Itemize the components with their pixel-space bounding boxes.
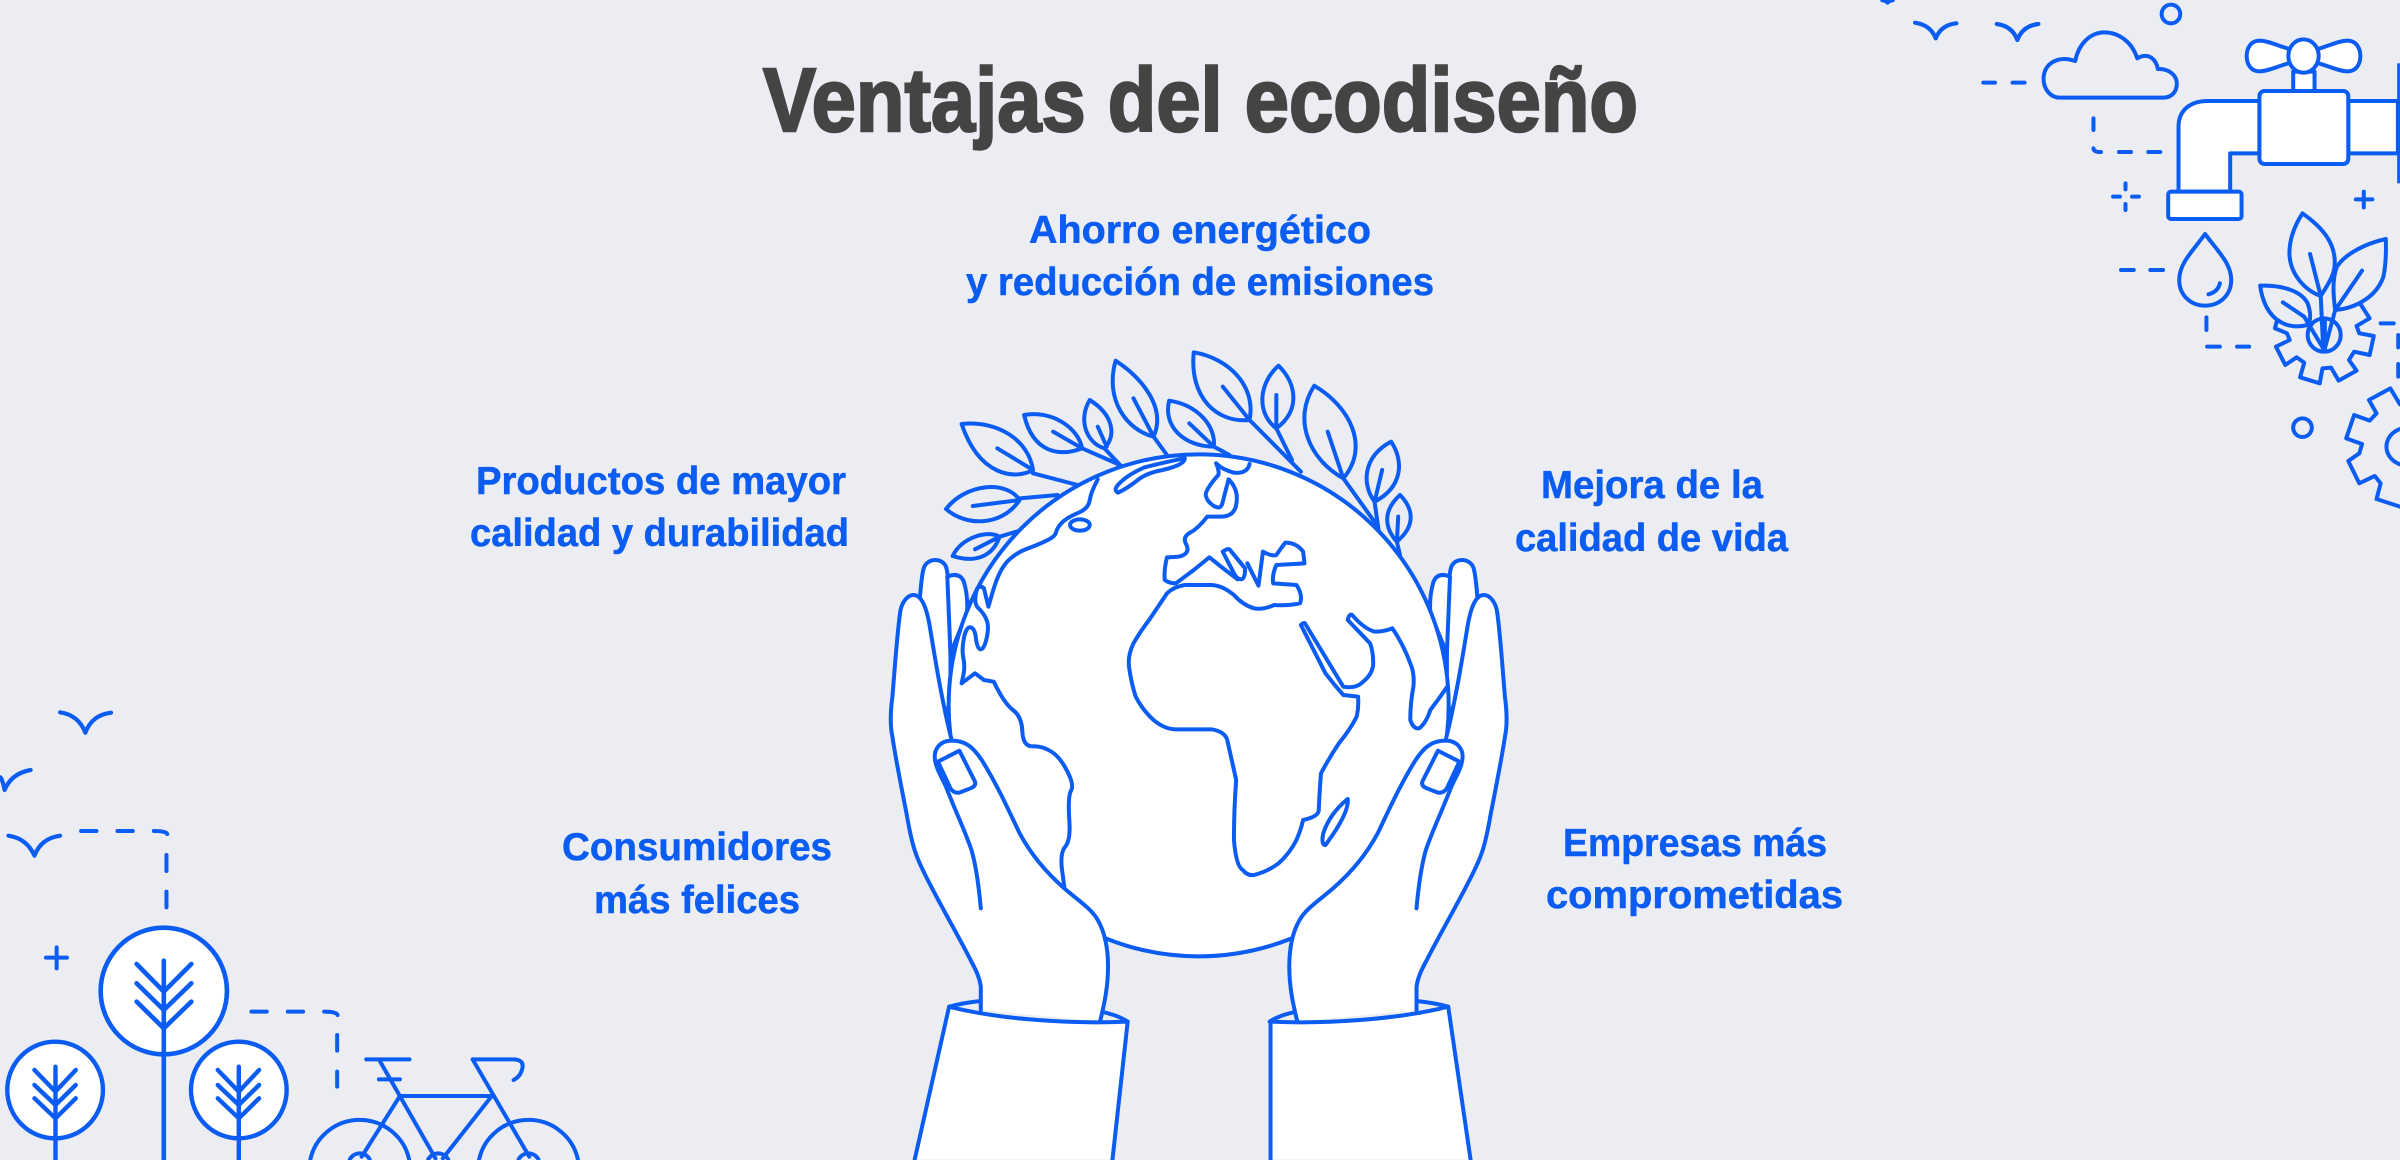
label: productos de mayor calidad: Productos de mayor: [476, 460, 846, 503]
globe: [949, 454, 1449, 956]
bottom-left decoration: [0, 712, 578, 1159]
label: mejora de la calidad de vida: calidad de vida: [1515, 517, 1788, 560]
label: mejora de la calidad de vida: [1515, 464, 1788, 560]
label: ahorro energético: Ahorro energético: [1029, 209, 1371, 252]
icon: tree large: [101, 928, 227, 1159]
icon: second gear: [2346, 388, 2400, 507]
left hand: [891, 595, 1128, 1159]
icon: sparkle and plus: [2113, 183, 2372, 210]
back fingers: [918, 560, 1479, 720]
label: consumidores más felices: [562, 826, 832, 922]
illustration: hands holding the globe: [891, 352, 1507, 1159]
icon: cloud: [2044, 32, 2177, 98]
label: consumidores más felices: más felices: [594, 879, 800, 922]
title: Ventajas del ecodiseño: [763, 51, 1638, 151]
label: productos de mayor calidad: calidad y durabilidad: [470, 512, 849, 555]
icon: water drop: [2179, 234, 2231, 306]
label: ahorro energético: y reducción de emisiones: [966, 261, 1434, 304]
label: ahorro energético: [966, 209, 1434, 304]
label: empresas más comprometidas: comprometidas: [1546, 874, 1843, 917]
icon: birds: [0, 712, 111, 856]
icon: small circles: [2162, 5, 2312, 437]
leaves branch: [946, 352, 1411, 559]
dashed connectors: [81, 831, 338, 1087]
icon: tree left: [7, 1042, 103, 1159]
icon: birds: [1882, 0, 2038, 40]
label: empresas más comprometidas: [1546, 822, 1843, 917]
icon: bicycle: [310, 1059, 578, 1159]
label: empresas más comprometidas: Empresas más: [1563, 822, 1827, 865]
top-right decoration: [1882, 0, 2400, 507]
continents: [962, 458, 1447, 887]
icon: water tap: [2168, 39, 2400, 219]
icon: plus: [46, 947, 67, 968]
label: mejora de la calidad de vida: Mejora de la: [1541, 464, 1763, 507]
label: productos de mayor calidad: [470, 460, 849, 555]
label: consumidores más felices: Consumidores: [562, 826, 832, 869]
dashed connectors: [1983, 83, 2398, 377]
icon: gear with plant: [2260, 213, 2386, 383]
icon: tree right: [191, 1042, 287, 1159]
right hand: [1270, 595, 1507, 1159]
